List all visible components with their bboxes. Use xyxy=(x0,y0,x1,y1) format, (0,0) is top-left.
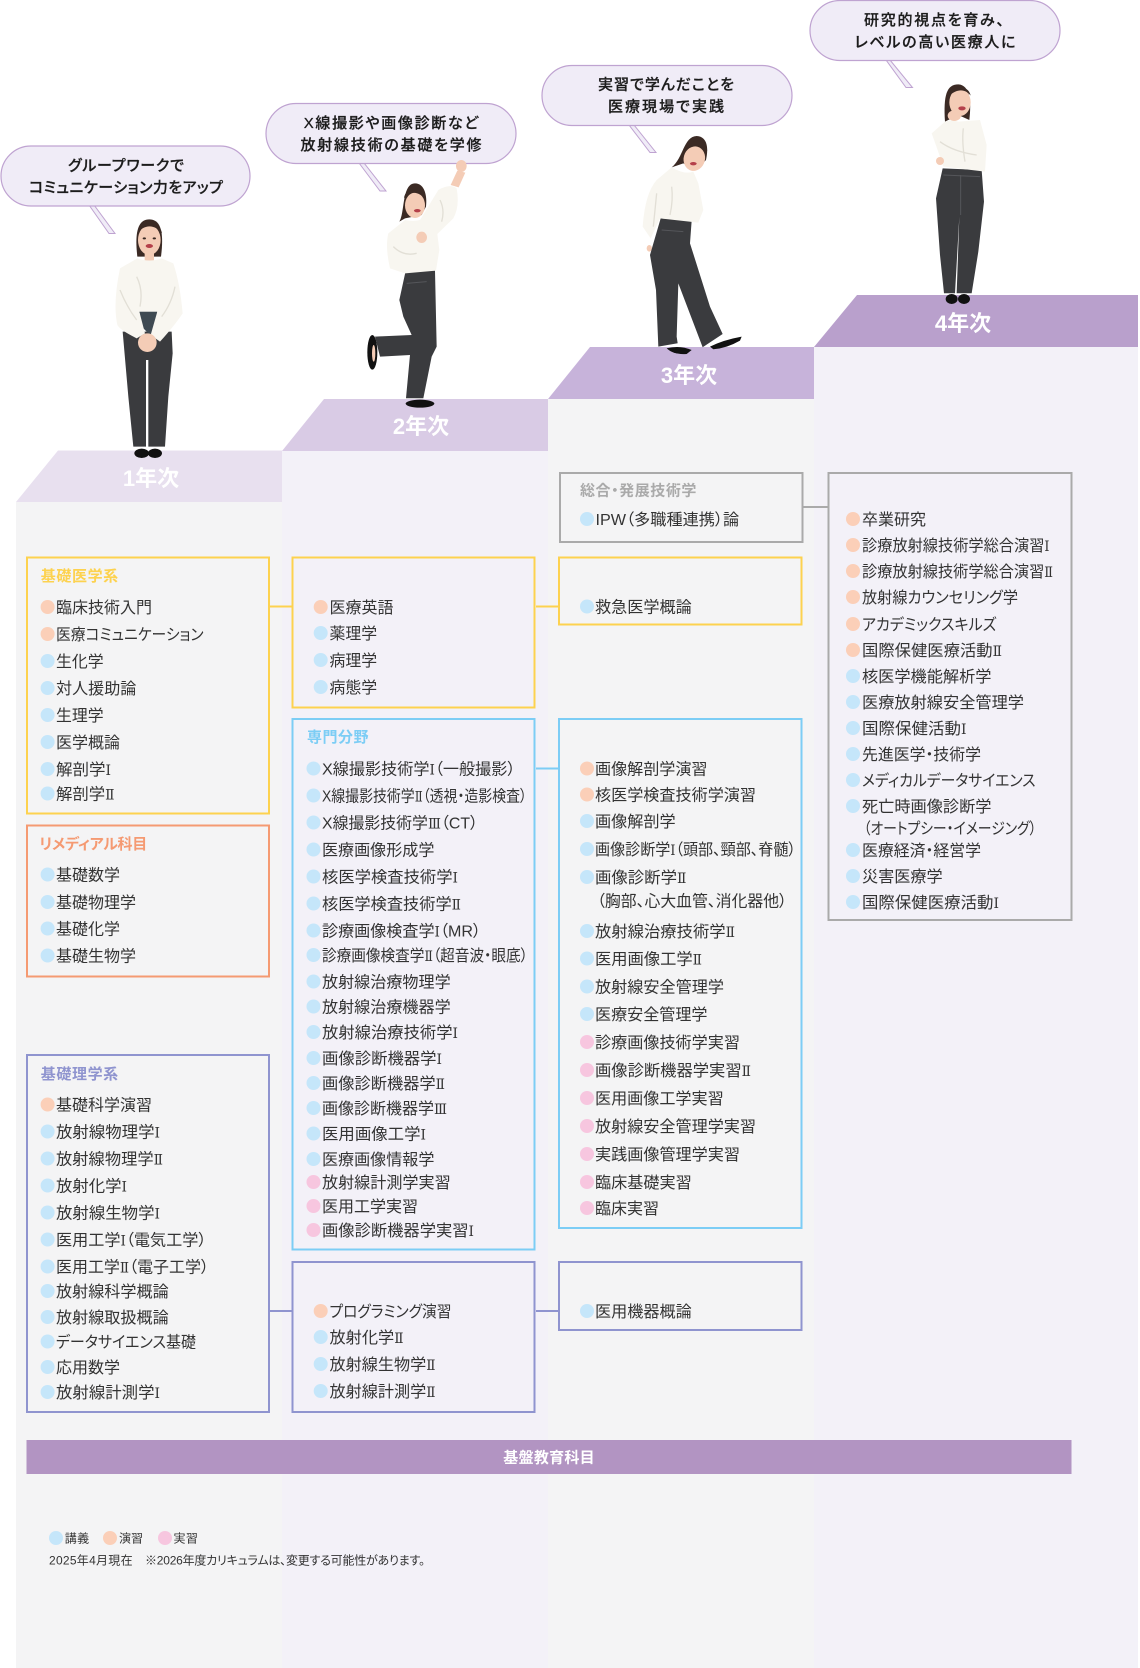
course list: 基礎生物学 xyxy=(56,948,136,966)
course list: 生理学 xyxy=(56,707,104,725)
course list: 放射線物理学Ⅱ xyxy=(56,1150,163,1168)
step: 2nd year xyxy=(282,399,548,451)
course list: 対人援助論 xyxy=(56,680,136,698)
speech bubble: 2nd year: X線撮影や画像診断など xyxy=(304,114,479,132)
legend: 講義 xyxy=(65,1530,89,1546)
course list: 画像診断機器学Ⅲ xyxy=(322,1100,447,1118)
connector lines xyxy=(270,507,829,1311)
step: 2nd year: 2年次 xyxy=(393,414,449,439)
course list: 画像診断機器学Ⅰ xyxy=(322,1050,442,1068)
course list: 解剖学Ⅰ xyxy=(56,761,111,779)
legend xyxy=(49,1530,198,1546)
speech bubble: 3rd year: 医療現場で実践 xyxy=(608,98,724,116)
course list: 医用工学Ⅰ（電気工学） xyxy=(56,1232,206,1250)
course list: 医用画像工学Ⅰ xyxy=(322,1126,426,1144)
course list: IPW（多職種連携）論 xyxy=(596,511,739,529)
heading: basic medicine: 基礎医学系 xyxy=(41,567,118,585)
bar: foundation education subjects: 基盤教育科目 xyxy=(503,1448,595,1466)
speech bubble: 3rd year xyxy=(542,66,792,152)
heading: integrated technology: 総合・発展技術学 xyxy=(580,482,696,500)
course list xyxy=(41,599,204,804)
course list: X線撮影技術学Ⅲ（CT） xyxy=(322,814,478,832)
course list: 医用画像工学Ⅱ xyxy=(595,950,702,968)
course list: 病態学 xyxy=(330,679,377,697)
course list: 画像診断機器学実習Ⅱ xyxy=(595,1062,751,1080)
speech bubble: 1st year: コミュニケーション力をアップ xyxy=(29,180,223,196)
course list: 放射線計測学Ⅰ xyxy=(56,1384,160,1402)
speech bubble: 4th year xyxy=(810,0,1060,88)
course list: 医療安全管理学 xyxy=(595,1006,708,1024)
speech bubble: 4th year: 研究的視点を育み、 xyxy=(864,12,1004,29)
heading: remedial: リメディアル科目 xyxy=(39,835,147,853)
step: 4th year: 4年次 xyxy=(935,311,991,336)
course list: 医用機器概論 xyxy=(595,1303,692,1321)
speech bubble: 2nd year xyxy=(266,104,516,191)
course list: 解剖学Ⅱ xyxy=(56,786,114,804)
panel: specialised field (year 2) xyxy=(292,719,534,1250)
course list: 医療コミュニケーション xyxy=(56,626,204,644)
course list: 放射線取扱概論 xyxy=(56,1309,169,1327)
panel: remedial subjects xyxy=(27,826,269,976)
course list: データサイエンス基礎 xyxy=(56,1332,196,1352)
course list: 医療画像情報学 xyxy=(322,1151,434,1169)
course list: 画像診断機器学Ⅱ xyxy=(322,1075,445,1093)
course list: 放射線治療物理学 xyxy=(322,974,451,992)
course list: 放射線治療技術学Ⅰ xyxy=(322,1024,458,1042)
figure: student raising arm, 2nd year xyxy=(367,160,467,408)
course list: （オートプシー・イメージング） xyxy=(864,820,1036,838)
course list: 画像解剖学演習 xyxy=(595,760,708,778)
course list xyxy=(41,1096,209,1402)
figure: student leaning, 3rd year xyxy=(643,136,742,354)
course list: プログラミング演習 xyxy=(330,1303,452,1321)
panel: specialised field (year 3) xyxy=(559,719,802,1228)
course list: 基礎数学 xyxy=(56,866,120,884)
course list xyxy=(580,760,796,1218)
course list: 基礎化学 xyxy=(56,920,120,938)
panel: integrated technology (year 4) xyxy=(828,473,1072,920)
panel: integrated technology (year 3) xyxy=(560,473,802,542)
course list: 臨床実習 xyxy=(595,1200,659,1218)
course list: 救急医学概論 xyxy=(595,598,692,616)
step: 1st year xyxy=(16,450,282,502)
course list xyxy=(306,760,528,1240)
legend: 実習 xyxy=(174,1532,198,1546)
course list: 診療画像検査学Ⅱ（超音波・眼底） xyxy=(322,947,528,965)
footnote: 2025年4月現在 xyxy=(49,1554,133,1568)
course list: 放射線安全管理学実習 xyxy=(595,1118,756,1136)
course list: 画像診断学Ⅰ（頭部、頸部、脊髄） xyxy=(595,841,796,859)
course list: 医療経済・経営学 xyxy=(862,842,981,860)
course list: 死亡時画像診断学 xyxy=(862,798,992,816)
footnote xyxy=(49,1552,425,1568)
course list: 薬理学 xyxy=(330,625,377,643)
course list: アカデミックスキルズ xyxy=(862,615,997,634)
course list: 画像診断機器学実習Ⅰ xyxy=(322,1222,474,1240)
footnote: ※2026年度カリキュラムは、変更する可能性があります。 xyxy=(145,1552,425,1568)
speech bubble: 3rd year: 実習で学んだことを xyxy=(598,76,734,94)
course list: 核医学機能解析学 xyxy=(862,668,992,686)
course list: 実践画像管理学実習 xyxy=(595,1146,740,1164)
figure: student thinking, 4th year xyxy=(932,84,987,304)
course list: 先進医学・技術学 xyxy=(862,746,981,764)
course list: 放射線治療技術学Ⅱ xyxy=(595,923,735,941)
step: 1st year: 1年次 xyxy=(123,466,179,491)
course list: 卒業研究 xyxy=(862,511,926,529)
course list: 医療放射線安全管理学 xyxy=(862,694,1024,712)
course list: 診療放射線技術学総合演習Ⅱ xyxy=(862,563,1053,581)
step: 3rd year: 3年次 xyxy=(661,363,717,388)
course list: （胸部、心大血管、消化器他） xyxy=(597,892,787,910)
column backgrounds xyxy=(16,347,1138,1668)
course list: 災害医療学 xyxy=(862,868,943,886)
course list: 医用画像工学実習 xyxy=(595,1090,724,1108)
course list: 基礎科学演習 xyxy=(56,1096,152,1114)
panel: basic medicine (year 3) xyxy=(559,558,802,624)
course list: 放射線物理学Ⅰ xyxy=(56,1124,160,1142)
course list: 国際保健医療活動Ⅱ xyxy=(862,642,1002,660)
course list: 医用工学Ⅱ（電子工学） xyxy=(56,1258,209,1276)
course list: メディカルデータサイエンス xyxy=(862,771,1036,790)
course list: X線撮影技術学Ⅰ（一般撮影） xyxy=(322,760,516,778)
figure: student standing, 1st year xyxy=(116,219,183,458)
course list xyxy=(846,511,1053,912)
course list: 診療画像検査学Ⅰ（MR） xyxy=(322,922,481,940)
speech bubble: 4th year: レベルの高い医療人に xyxy=(854,34,1016,51)
course list xyxy=(314,599,394,697)
heading: specialised field: 専門分野 xyxy=(307,728,368,746)
course list: 核医学検査技術学演習 xyxy=(595,786,756,804)
course list: 応用数学 xyxy=(56,1359,120,1377)
course list: 放射線科学概論 xyxy=(56,1283,169,1301)
course list: 国際保健医療活動 Ⅰ xyxy=(862,894,999,912)
panel: basic medicine (year 1) xyxy=(27,558,269,814)
course list xyxy=(41,866,136,966)
step: 3rd year xyxy=(548,347,814,399)
course list: 放射線カウンセリング学 xyxy=(862,589,1018,607)
course list: 放射線治療機器学 xyxy=(322,998,451,1016)
course list: 放射化学Ⅱ xyxy=(330,1329,404,1347)
course list: 放射化学Ⅰ xyxy=(56,1178,127,1196)
course list: X線撮影技術学Ⅱ（透視・造影検査） xyxy=(322,788,527,806)
step: 4th year xyxy=(814,295,1138,347)
course list: 医療英語 xyxy=(330,599,394,617)
course list xyxy=(314,1303,452,1401)
course list: 核医学検査技術学Ⅰ xyxy=(322,868,458,886)
course list: 医療画像形成学 xyxy=(322,842,434,860)
course list: 医学概論 xyxy=(56,734,120,752)
course list: 臨床基礎実習 xyxy=(595,1174,692,1192)
course list: 放射線計測学Ⅱ xyxy=(330,1383,436,1401)
course list: 医用工学実習 xyxy=(322,1198,418,1216)
course list: 国際保健活動Ⅰ xyxy=(862,720,966,738)
course list: 病理学 xyxy=(330,652,377,670)
speech bubble: 1st year: グループワークで xyxy=(68,158,184,174)
course list: 核医学検査技術学Ⅱ xyxy=(322,896,461,914)
speech bubble: 2nd year: 放射線技術の基礎を学修 xyxy=(300,137,482,154)
course list: 放射線安全管理学 xyxy=(595,978,724,996)
course list: 基礎物理学 xyxy=(56,894,136,912)
panel: basic science (year 2) xyxy=(292,1262,534,1412)
legend: 演習 xyxy=(119,1532,143,1546)
panel: basic medicine (year 2) xyxy=(292,558,534,708)
heading: basic science: 基礎理学系 xyxy=(41,1065,118,1083)
speech bubble: 1st year xyxy=(1,146,250,234)
panel: basic science (year 3) xyxy=(559,1262,802,1330)
course list: 生化学 xyxy=(56,653,104,671)
course list: 画像診断学Ⅱ xyxy=(595,869,686,887)
course list: 臨床技術入門 xyxy=(56,599,152,617)
bar: foundation education subjects xyxy=(26,1440,1072,1474)
course list: 画像解剖学 xyxy=(595,813,676,831)
course list: 診療放射線技術学総合演習Ⅰ xyxy=(862,537,1050,555)
course list: 診療画像技術学実習 xyxy=(595,1034,740,1052)
course list: 放射線計測学実習 xyxy=(322,1174,451,1192)
course list: 放射線生物学Ⅰ xyxy=(56,1204,160,1222)
course list: 放射線生物学Ⅱ xyxy=(330,1356,436,1374)
panel: basic science (year 1) xyxy=(27,1055,269,1412)
